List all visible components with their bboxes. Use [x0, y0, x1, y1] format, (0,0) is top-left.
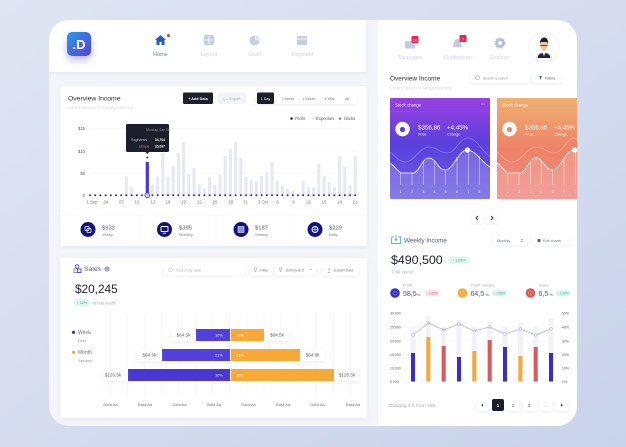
card: orange stock change: 7 — [574, 190, 576, 194]
icon: sales bag — [74, 265, 81, 272]
x axis labels: 22 — [197, 200, 202, 204]
growth badge: vs last years — [92, 300, 115, 306]
button: Edit charts — [532, 235, 570, 246]
diverging bars: 16% — [236, 334, 244, 338]
x axis labels: Data Aa — [207, 402, 222, 407]
metric: Profit margin: 64,5 % — [470, 291, 489, 298]
stat: Yearly — [80, 222, 115, 237]
card: orange stock change: Change — [554, 132, 567, 136]
panel: overview income chart — [60, 86, 367, 246]
button: Export Data — [324, 268, 357, 277]
x axis labels: Data Aa — [276, 402, 291, 407]
icon: logo: .D — [72, 37, 86, 52]
heading: Overview Income: Overview Income — [68, 96, 121, 102]
range tabs: 1 Week — [282, 97, 294, 101]
chart: weekly bars and line: 40% — [562, 326, 569, 330]
chart: weekly bars and line: 0% — [562, 380, 567, 384]
select: Monthly — [493, 235, 527, 246]
pagination — [476, 399, 568, 411]
search box: Search by data... — [176, 268, 204, 272]
nav item: Messages: Messages — [398, 55, 423, 61]
stat: Monthly: $395 — [179, 226, 192, 232]
bar value labels: $64.5k — [177, 333, 191, 338]
card: purple stock change: 4 — [433, 190, 435, 194]
metric: Profit margin: ↑ 1,05% — [494, 291, 505, 295]
tooltip: Monday, Sep 06 — [146, 128, 170, 132]
range tabs: 1 Year — [324, 97, 335, 101]
tooltip: Pageviews — [131, 138, 147, 142]
dashboard window — [49, 20, 587, 426]
button: Filters: Filters — [545, 76, 555, 80]
tooltip: 34,704 — [155, 138, 165, 142]
card: purple stock change: ••• — [481, 101, 486, 106]
chart: weekly bars and line: 5 000 — [390, 380, 399, 384]
card: orange stock change: Price — [525, 132, 534, 136]
card: orange stock change — [497, 98, 587, 199]
diverging bars: 36% — [236, 374, 244, 378]
nav item: Home — [153, 34, 170, 58]
button: Sort: Sort by A-Z — [286, 268, 305, 272]
chart: weekly bars and line: 20 000 — [390, 340, 401, 344]
x axis labels: 16 — [166, 200, 171, 204]
pagination: 3 — [528, 403, 531, 409]
x axis labels: Data Aa — [346, 402, 361, 407]
button: Add Data — [183, 92, 213, 104]
stat: Weekly: $187 — [255, 226, 268, 232]
stat: Weekly: Weekly — [255, 232, 268, 237]
search box — [165, 268, 244, 277]
metric: Sales: ↑ 1,05% — [557, 291, 569, 295]
card: purple stock change: 1 — [400, 190, 402, 194]
card: orange stock change: 5 — [552, 190, 554, 194]
metric: Profit: 58,5% — [403, 291, 421, 298]
bar value labels: $64.5k — [270, 333, 285, 338]
metric: Profit margin — [458, 282, 507, 298]
x axis labels: 9 — [292, 200, 295, 204]
growth badge — [74, 299, 115, 306]
pagination: ... — [544, 404, 548, 409]
x axis labels: 25 — [213, 200, 218, 204]
metric: Profit margin: Profit margin — [471, 282, 494, 288]
button: Filter — [251, 268, 272, 277]
nav item: Notifications: Notifications — [444, 55, 473, 61]
y axis labels: $10 — [78, 149, 86, 154]
card: purple stock change: 3 — [422, 190, 424, 194]
card: orange stock change: $356,86 — [525, 124, 548, 132]
nav item: Notifications: 7 — [462, 37, 464, 41]
bar value labels: $64.5k — [143, 353, 157, 358]
x axis labels: 28 — [229, 200, 234, 204]
card: purple stock change: 8 — [478, 190, 480, 194]
x axis labels: 31 — [243, 200, 248, 204]
range tabs: 1 Month — [302, 97, 316, 101]
y axis labels: $15 — [78, 126, 86, 131]
y axis labels — [78, 126, 85, 197]
x axis labels: 18 — [337, 200, 342, 204]
x axis labels: 13 — [151, 200, 156, 204]
nav item: Layout — [201, 35, 218, 58]
nav item: Layout: Layout — [201, 52, 218, 58]
x axis labels: Data Aa — [172, 402, 187, 407]
x axis labels: Data Aa — [310, 402, 325, 407]
y axis labels: 0 — [83, 193, 86, 198]
icon: logo — [67, 32, 91, 56]
subtitle right: Lorem Ipsum is simply dummy — [390, 86, 453, 90]
range tabs: All — [345, 97, 349, 101]
chart legend: Clicks — [344, 116, 355, 121]
growth badge: ↑ 12% — [77, 301, 88, 305]
range tabs — [256, 92, 357, 104]
card: purple stock change: 5 — [445, 190, 447, 194]
chart legend — [290, 116, 355, 121]
x axis labels: 6 — [276, 200, 279, 204]
chart: weekly bars and line: 20% — [562, 353, 569, 357]
x axis labels: 1 Sep — [87, 200, 98, 204]
nav item: Chart: Chart — [248, 52, 262, 58]
avatar — [529, 32, 559, 62]
legend: Week — [78, 330, 91, 336]
card: purple stock change: Change — [447, 132, 460, 136]
nav item: Messages — [398, 36, 423, 61]
nav item: Payment: Payment — [292, 52, 314, 58]
weekly badge: ↑ 1,05% — [452, 258, 466, 262]
icon: info — [104, 266, 110, 272]
stat: Daily: $229 — [329, 226, 342, 232]
tooltip — [126, 124, 170, 154]
metric: Sales: 6,5 % — [538, 291, 553, 298]
card: purple stock change: +4,45% — [447, 124, 469, 132]
x axis labels: 19 — [181, 200, 186, 204]
button: Export: [→ Export — [224, 97, 241, 101]
button: Add Data: + Add Data — [188, 97, 209, 101]
chart: weekly bars and line: 30% — [562, 340, 569, 344]
x axis labels: 3 Oct — [258, 200, 269, 204]
stat: Daily: Daily — [329, 232, 338, 237]
metric: Profit: Profit — [403, 282, 413, 288]
bar chart: expenses bars — [126, 142, 355, 195]
nav item: Messages: 10 — [413, 38, 417, 42]
chart: weekly bars and line: 25 000 — [390, 326, 401, 330]
metric: Profit: ↓ 1,05% — [426, 291, 438, 295]
chart: weekly bars and line: 15 000 — [390, 353, 401, 357]
nav item: Payment — [292, 36, 314, 58]
card: orange stock change: 3 — [529, 190, 531, 194]
x axis labels: 07 — [119, 200, 124, 204]
stat: Daily — [308, 222, 342, 237]
pagination text: Showing 1-5 from 100 — [388, 403, 435, 409]
button: Filters — [533, 72, 561, 83]
nav item: Settings: Settings — [490, 55, 509, 61]
card: orange stock change: 4 — [540, 190, 542, 194]
legend: Second — [78, 358, 92, 363]
icon: info: i — [106, 267, 108, 272]
carousel arrows — [472, 212, 498, 224]
diverging bars: 36% — [215, 374, 223, 378]
stat: Monthly — [157, 222, 193, 237]
metric: Profit — [390, 282, 440, 298]
baseline dots — [90, 194, 356, 196]
card: purple stock change: $356,86 — [418, 124, 441, 132]
x axis labels: 15 — [322, 200, 327, 204]
card: purple stock change: 6 — [456, 190, 458, 194]
bar value labels — [103, 329, 359, 381]
nav item: Settings — [490, 38, 509, 61]
x axis labels — [86, 200, 358, 204]
x axis labels: Data Aa — [241, 402, 256, 407]
heading: Sales: Sales — [84, 266, 102, 273]
x axis labels: 21 — [353, 200, 358, 204]
heading: Weekly Income: Weekly Income — [404, 238, 447, 244]
button: Export Data: Export Data — [334, 268, 354, 272]
range tabs: 1 Day — [261, 97, 270, 101]
stat: Yearly: Yearly — [102, 232, 113, 237]
diverging bars: 21% — [215, 354, 223, 358]
card: purple stock change: Price — [418, 132, 427, 136]
bar value labels: $126.5k — [339, 373, 356, 378]
card: orange stock change: Stock change — [502, 102, 529, 108]
chart: weekly bars and line: 30 000 — [390, 312, 401, 316]
y axis labels: $5 — [80, 171, 86, 176]
sales total: $20,245 — [75, 282, 118, 296]
diverging bars: 21% — [236, 354, 244, 358]
icon: weekly income — [392, 235, 400, 244]
weekly badge — [448, 256, 470, 264]
active bar — [145, 156, 150, 198]
x axis labels: 04 — [104, 200, 109, 204]
x axis labels: Data Aa — [103, 402, 118, 407]
chart legend: Profit — [295, 116, 306, 121]
legend: First — [78, 338, 87, 343]
stat: Yearly: $932 — [102, 226, 115, 232]
chart: weekly bars and line — [390, 312, 569, 384]
search product: Search product — [482, 76, 509, 80]
select: Monthly: Monthly — [497, 239, 510, 243]
chart legend: Expenses — [316, 116, 334, 121]
panel: top right navigation — [398, 32, 559, 62]
x axis labels: 10 — [135, 200, 140, 204]
nav item: Home: Home — [153, 52, 168, 58]
search product — [470, 72, 530, 83]
chart: weekly bars and line: 10% — [562, 366, 569, 370]
heading: Overview Income right: Overview Income — [390, 76, 441, 82]
legend — [72, 330, 92, 363]
card: orange stock change: +4,45% — [554, 124, 576, 132]
button: Filter: Filter — [260, 268, 269, 272]
metric: Sales: Sales — [539, 282, 549, 288]
button: Sort — [275, 268, 315, 277]
legend: Month — [78, 350, 92, 356]
pagination: 1 — [497, 403, 500, 409]
card: purple stock change: 7 — [467, 190, 469, 194]
card: purple stock change — [390, 98, 490, 199]
card: orange stock change: 2 — [518, 190, 520, 194]
button: Edit charts: Edit charts — [543, 239, 561, 243]
nav item: Notifications — [444, 35, 473, 61]
chart: weekly bars and line: 10 000 — [390, 366, 401, 370]
tooltip: Unique — [139, 144, 150, 148]
total spend label: Total spend — [391, 270, 414, 274]
subtitle: Lorem Ipsum is simply dummy — [68, 105, 133, 111]
weekly total: $490,500 — [391, 253, 443, 267]
x axis labels: 12 — [306, 200, 311, 204]
stat: Weekly — [234, 222, 268, 237]
tooltip: 35,097 — [155, 144, 165, 148]
diverging bars: 16% — [215, 334, 223, 338]
nav item: Chart — [248, 36, 262, 56]
card: purple stock change: Stock change — [395, 102, 422, 108]
panel: header navigation — [49, 20, 366, 72]
pagination: 2 — [512, 403, 515, 409]
card: purple stock change: 2 — [411, 190, 413, 194]
diverging bars — [128, 329, 334, 381]
bar value labels: $64.5k — [306, 353, 320, 358]
chart: weekly bars and line: 50% — [562, 312, 569, 316]
card: orange stock change: 6 — [563, 190, 565, 194]
bar value labels: $126.5k — [105, 373, 122, 378]
panel: sales — [60, 258, 367, 418]
stat: Monthly: Monthly — [179, 232, 193, 237]
metric: Sales — [526, 282, 570, 298]
x axis labels — [104, 404, 360, 406]
x axis labels: Data Aa — [138, 402, 153, 407]
card: orange stock change: 1 — [507, 190, 509, 194]
button: Export — [218, 92, 246, 104]
